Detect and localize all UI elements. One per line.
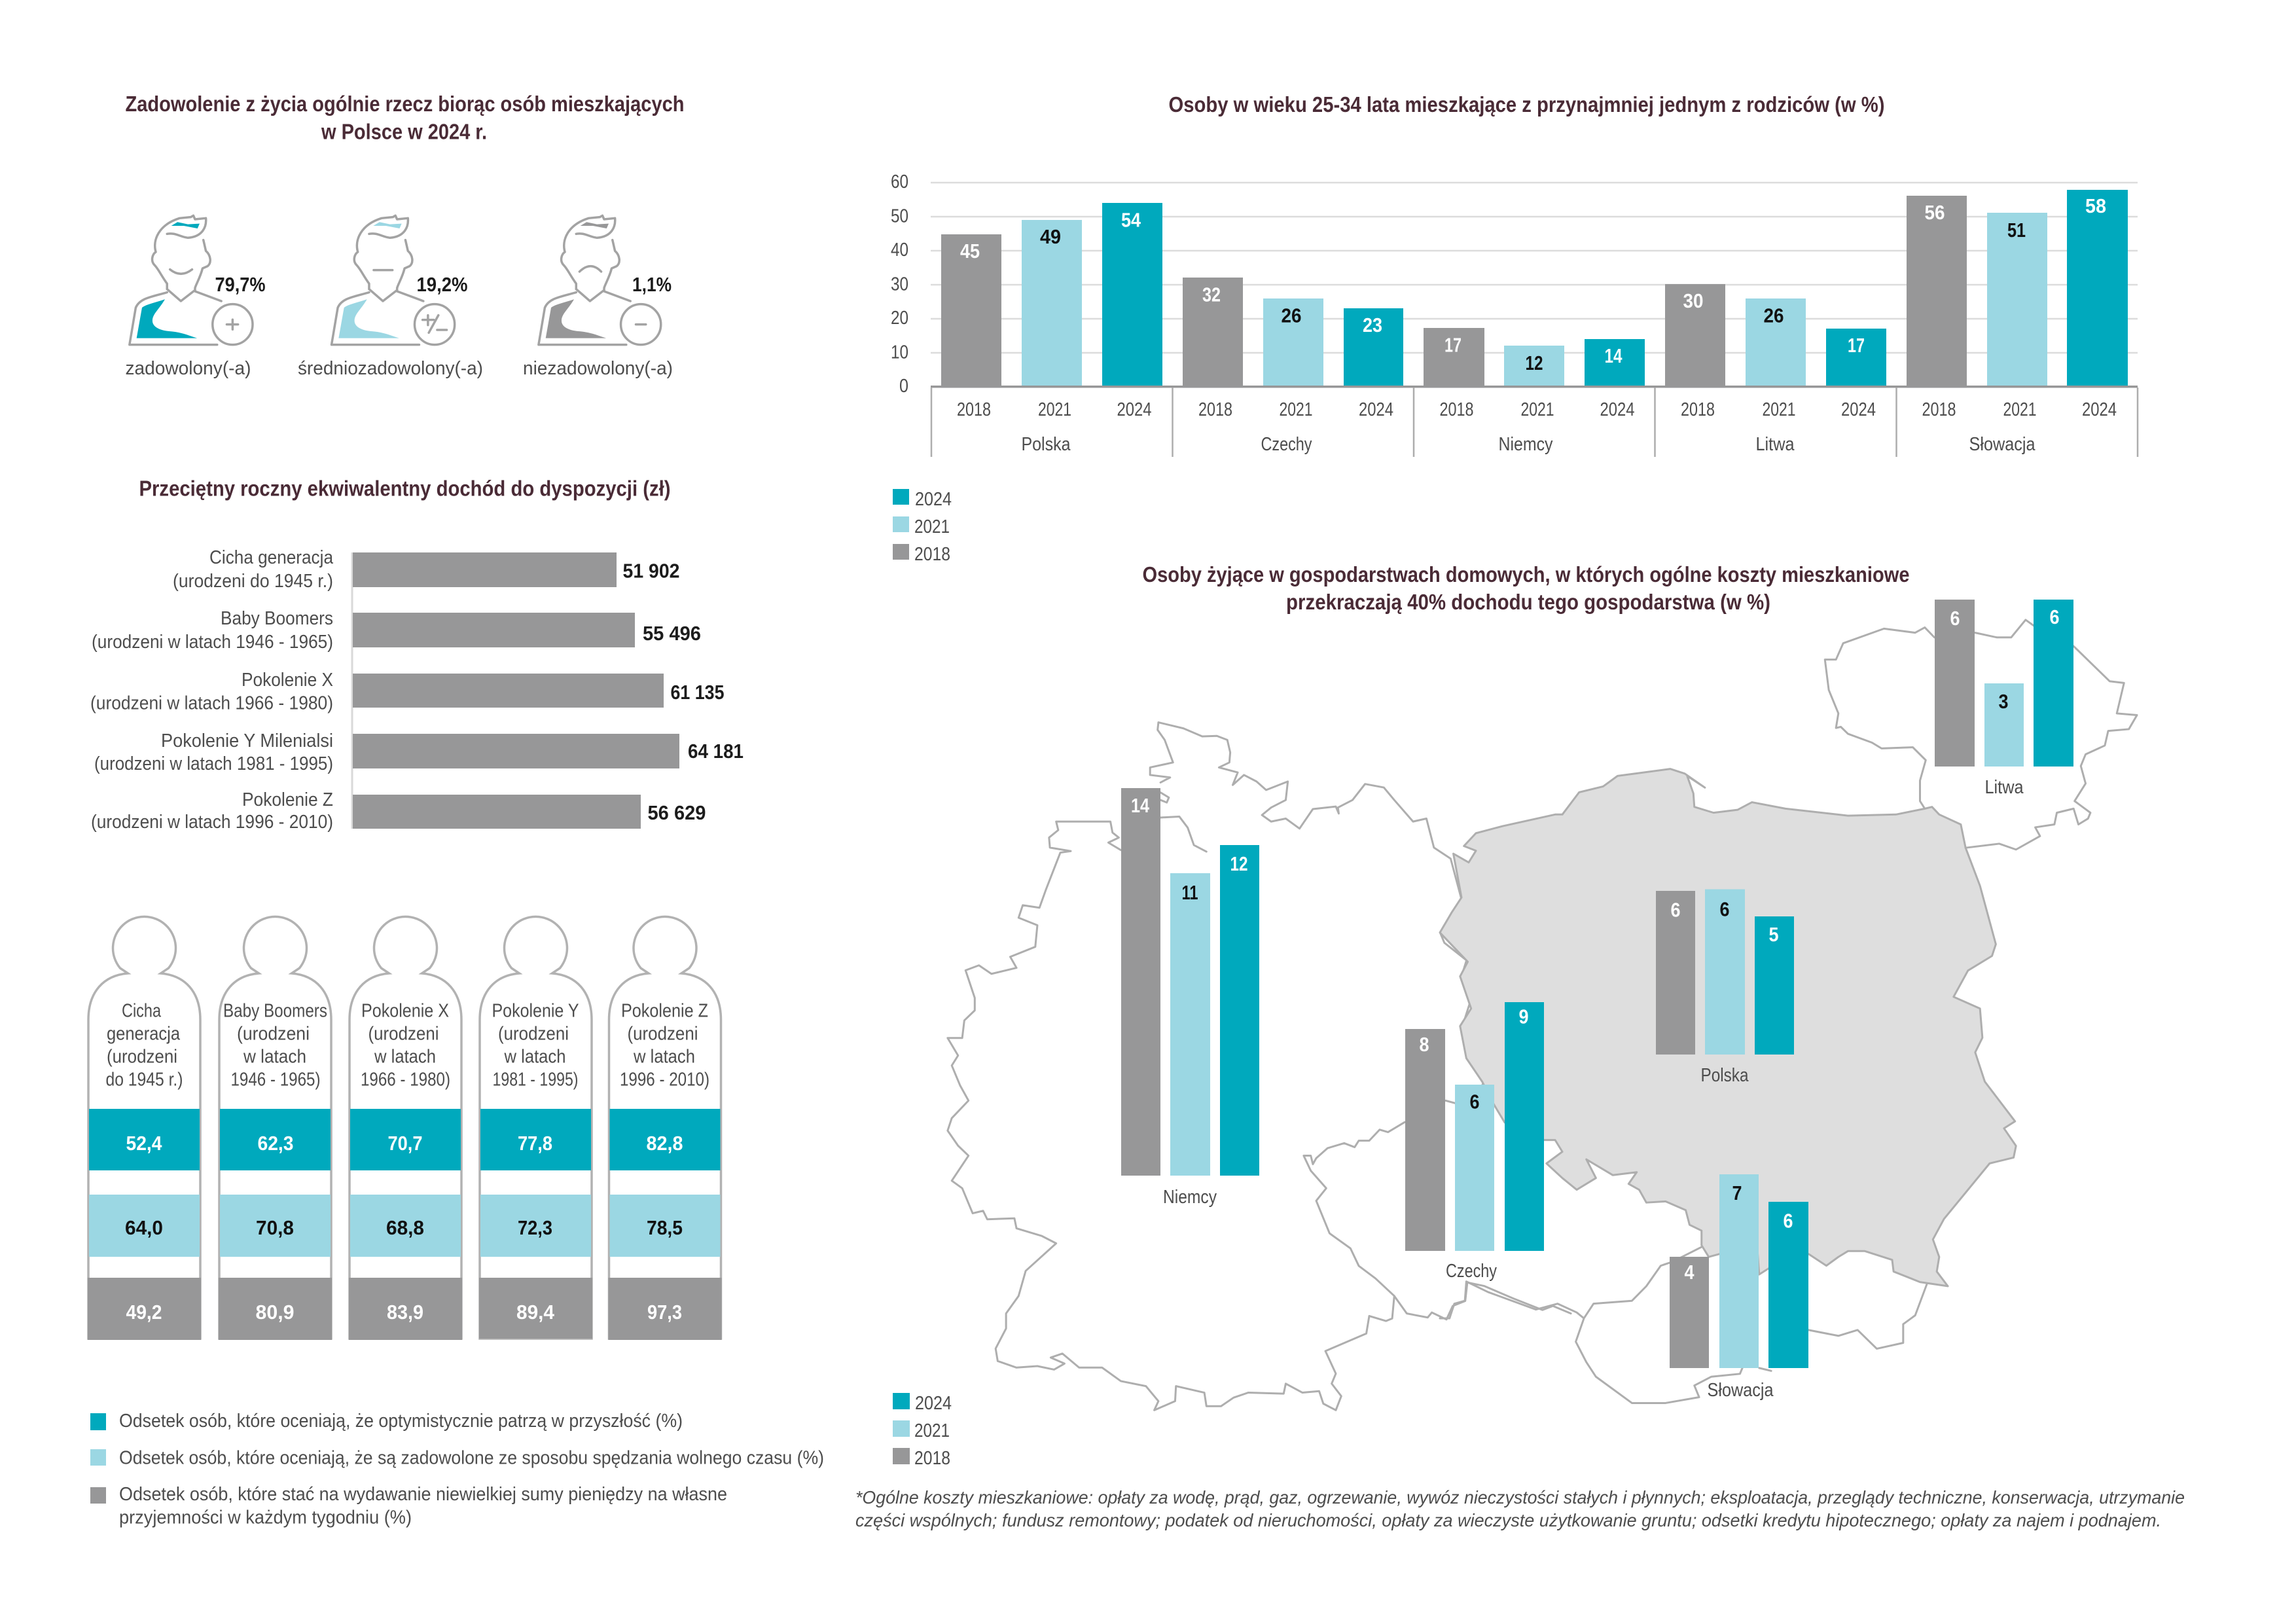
legend: years map: 2021 — [914, 1420, 950, 1441]
bars: Czechy map: Czechy — [1446, 1261, 1497, 1282]
person: Baby Boomers: 70,8 — [256, 1216, 294, 1239]
person: Cicha generacja: (urodzeni — [107, 1046, 177, 1067]
labels: generations: Cicha generacja — [209, 547, 334, 568]
person: Baby Boomers: (urodzeni — [237, 1024, 310, 1045]
bars: Litwa map: Litwa — [1984, 777, 2024, 798]
person: Pokolenie Z: (urodzeni — [627, 1024, 698, 1045]
bars: Niemcy map: 11 — [1182, 881, 1198, 904]
bars: Czechy: 32 — [1202, 283, 1221, 306]
values: income: 61 135 — [670, 681, 724, 704]
x axis with years and countries: 2021 — [1038, 399, 1071, 420]
person: Cicha generacja — [88, 916, 201, 1340]
person: Cicha generacja: 64,0 — [125, 1216, 163, 1239]
labels: generations: (urodzeni w latach 1981 - 1995) — [94, 753, 333, 774]
labels: satisfaction categories: niezadowolony(-a) — [523, 358, 673, 379]
values: income: 64 181 — [688, 740, 744, 763]
bars: Litwa — [1665, 284, 1886, 386]
map: Czechia southern border — [1394, 1282, 1571, 1320]
heading: housing cost overburden — [1143, 562, 1910, 614]
person: Pokolenie Y: 1981 - 1995) — [492, 1070, 579, 1091]
legend: years top chart — [893, 489, 952, 565]
person: Pokolenie Y — [479, 916, 592, 1339]
person: Cicha generacja: do 1945 r.) — [106, 1070, 183, 1091]
values: satisfaction percentages: 79,7% — [215, 273, 266, 296]
values: income: 55 496 — [643, 622, 701, 645]
person: Pokolenie Z: 78,5 — [647, 1216, 683, 1239]
panel: disposable income bar chart — [90, 477, 744, 833]
bars: income by generation — [351, 552, 679, 829]
person: Pokolenie Y: 77,8 — [518, 1132, 552, 1155]
bars: Polska: 45 — [960, 240, 980, 262]
legend: years map — [893, 1393, 952, 1469]
bars: Litwa map: 6 — [1950, 607, 1960, 630]
y axis and grid: 50 — [891, 206, 908, 226]
y axis and grid: 60 — [891, 171, 908, 192]
bars: Czechy map — [1405, 1002, 1544, 1282]
legend: years map: 2018 — [914, 1448, 950, 1469]
bars: Polska map: 6 — [1720, 898, 1729, 920]
bars: Słowacja: 58 — [2085, 194, 2106, 217]
bars: Słowacja map: Słowacja — [1707, 1380, 1774, 1401]
labels: generations — [90, 547, 334, 833]
x axis with years and countries: 2024 — [2082, 399, 2117, 420]
values: income: 56 629 — [648, 801, 706, 824]
heading: income: Przeciętny roczny ekwiwalentny dochód do dyspozycji (zł) — [139, 477, 670, 500]
panel: generations people chart — [88, 916, 721, 1340]
bars: Litwa map: 6 — [2050, 605, 2059, 628]
labels: generations: Baby Boomers — [221, 608, 333, 629]
x axis with years and countries: 2024 — [1600, 399, 1635, 420]
icon: moderately satisfied person — [332, 215, 455, 345]
bars: Czechy map: 6 — [1470, 1091, 1479, 1113]
labels: generations: (urodzeni w latach 1946 - 1965) — [92, 632, 333, 653]
person: Pokolenie Z: Pokolenie Z — [621, 1000, 708, 1021]
bars: Niemcy map: 14 — [1131, 794, 1150, 817]
bars: Litwa: 30 — [1683, 289, 1703, 312]
labels: satisfaction categories — [126, 358, 673, 379]
bars: Niemcy map: Niemcy — [1163, 1187, 1217, 1208]
x axis with years and countries — [931, 386, 2138, 457]
bars: Niemcy: 12 — [1525, 352, 1543, 374]
bars: Polska map: 6 — [1670, 898, 1681, 922]
bars: Słowacja: 56 — [1924, 201, 1945, 224]
person: Pokolenie X: (urodzeni — [368, 1024, 439, 1045]
person: Pokolenie Y: (urodzeni — [498, 1024, 569, 1045]
person: Cicha generacja: 49,2 — [126, 1301, 162, 1324]
x axis with years and countries: 2018 — [957, 399, 991, 420]
person: Baby Boomers: 80,9 — [255, 1301, 295, 1324]
legend: years top chart: 2024 — [915, 489, 952, 510]
person: Baby Boomers: 1946 - 1965) — [230, 1070, 321, 1091]
bars: Polska map: Polska — [1700, 1065, 1749, 1086]
x axis with years and countries: 2018 — [1922, 399, 1956, 420]
x axis with years and countries: Litwa — [1755, 434, 1795, 455]
map: Czechia and Slovakia outline — [1440, 1247, 1928, 1403]
legend: generations chart: Odsetek osób, które oceniają, że optymistycznie patrzą w przyszłość (%) — [119, 1411, 683, 1432]
x axis with years and countries: 2018 — [1198, 399, 1232, 420]
bars: Czechy — [1183, 278, 1403, 386]
legend: generations chart: Odsetek osób, które oceniają, że są zadowolone ze sposobu spędzania wolnego czasu (%) — [119, 1448, 824, 1469]
bars: Słowacja map: 7 — [1732, 1182, 1742, 1204]
y axis and grid: 40 — [891, 240, 908, 261]
bars: Polska: 54 — [1121, 208, 1141, 232]
person: Pokolenie Z — [609, 916, 721, 1340]
icon: dissatisfied person — [539, 215, 661, 345]
person: Pokolenie Y: Pokolenie Y — [492, 1000, 579, 1021]
x axis with years and countries: Czechy — [1261, 434, 1312, 455]
map: Germany outline — [948, 723, 1483, 1410]
legend: years top chart: 2018 — [914, 544, 950, 565]
person: Baby Boomers: 62,3 — [258, 1132, 293, 1155]
x axis with years and countries: 2018 — [1681, 399, 1715, 420]
bars: Czechy: 26 — [1282, 304, 1301, 327]
x axis with years and countries: 2021 — [2003, 399, 2037, 420]
bars: Słowacja map — [1670, 1174, 1808, 1401]
heading: living with parents: Osoby w wieku 25-34 lata mieszkające z przynajmniej jednym z rodziców (w %) — [1169, 92, 1885, 117]
person: Cicha generacja: generacja — [107, 1024, 181, 1045]
map: Poland filled — [1440, 769, 2016, 1286]
bars: Niemcy — [1424, 328, 1645, 386]
labels: satisfaction categories: średniozadowolony(-a) — [298, 358, 483, 379]
panel: young adults living with parents chart — [891, 92, 2138, 565]
bars: Litwa map: 3 — [1999, 690, 2008, 713]
bars: Litwa: 26 — [1763, 304, 1784, 327]
heading: housing cost overburden: przekraczają 40% dochodu tego gospodarstwa (w %) — [1286, 590, 1770, 614]
footnote — [855, 1487, 2185, 1530]
values: satisfaction percentages: 1,1% — [632, 273, 672, 296]
person: Pokolenie Y: 72,3 — [518, 1216, 552, 1239]
labels: satisfaction categories: zadowolony(-a) — [126, 358, 251, 379]
map: Lithuania outline — [1825, 620, 2137, 850]
person: Cicha generacja: 52,4 — [126, 1132, 162, 1155]
labels: generations: Pokolenie Y Milenialsi — [161, 731, 333, 751]
person: Pokolenie X: 68,8 — [386, 1216, 424, 1239]
x axis with years and countries: 2024 — [1117, 399, 1152, 420]
x axis with years and countries: 2021 — [1521, 399, 1554, 420]
legend: generations chart: przyjemności w każdym tygodniu (%) — [119, 1507, 412, 1528]
y axis and grid — [891, 171, 2138, 397]
values: income: 51 902 — [623, 559, 679, 583]
person: Baby Boomers: Baby Boomers — [223, 1000, 327, 1021]
bars: Niemcy: 14 — [1605, 344, 1623, 367]
bars: Niemcy map: 12 — [1230, 852, 1247, 875]
footnote: *Ogólne koszty mieszkaniowe: opłaty za wodę, prąd, gaz, ogrzewanie, wywóz nieczystości stałych i płynnych; eksploatacja, przeglądy techniczne, konserwacja, utrzymanie — [855, 1487, 2185, 1507]
heading: life satisfaction: w Polsce w 2024 r. — [321, 119, 487, 144]
x axis with years and countries: 2021 — [1762, 399, 1796, 420]
y axis and grid: 30 — [891, 274, 908, 295]
y axis and grid: 0 — [899, 376, 908, 397]
person: Pokolenie X: 83,9 — [387, 1301, 423, 1324]
bars: Słowacja: 51 — [2007, 219, 2026, 242]
x axis with years and countries: Niemcy — [1499, 434, 1553, 455]
x axis with years and countries: 2021 — [1279, 399, 1313, 420]
y axis and grid: 20 — [891, 308, 908, 329]
labels: generations: Pokolenie X — [242, 670, 333, 691]
person: Pokolenie X — [349, 916, 462, 1340]
x axis with years and countries: Polska — [1021, 434, 1071, 455]
person: Baby Boomers — [219, 916, 332, 1340]
bars: Polska map: 5 — [1768, 923, 1779, 946]
icon: satisfied person — [130, 215, 253, 345]
heading: life satisfaction — [126, 92, 685, 144]
bars: Litwa map — [1935, 600, 2073, 798]
bars: Litwa: 17 — [1848, 334, 1865, 357]
person: Pokolenie Y: w latach — [504, 1046, 565, 1067]
footnote: części wspólnych; fundusz remontowy; podatek od nieruchomości, opłaty za wieczyste użytkowanie gruntu; odsetki kredytu hipotecznego; opłaty za najem i podnajem. — [855, 1510, 2161, 1530]
bars: Niemcy: 17 — [1444, 334, 1462, 356]
bars: Czechy: 23 — [1363, 314, 1382, 336]
person: Cicha generacja: Cicha — [122, 1000, 162, 1021]
bars: Polska — [941, 203, 1162, 386]
person: Baby Boomers: w latach — [243, 1046, 306, 1067]
bars: Czechy map: 9 — [1518, 1005, 1529, 1028]
values: satisfaction percentages: 19,2% — [416, 273, 467, 296]
person: Pokolenie Z: 82,8 — [647, 1132, 683, 1155]
values: income — [623, 559, 744, 824]
person: Pokolenie Z: w latach — [633, 1046, 695, 1067]
panel: life satisfaction — [126, 92, 685, 379]
labels: generations: (urodzeni do 1945 r.) — [173, 571, 333, 592]
heading: life satisfaction: Zadowolenie z życia ogólnie rzecz biorąc osób mieszkających — [126, 92, 685, 116]
person: Pokolenie Y: 89,4 — [516, 1301, 555, 1324]
x axis with years and countries: Słowacja — [1969, 434, 2036, 455]
bars: Słowacja — [1907, 190, 2128, 386]
legend: generations chart — [90, 1411, 824, 1528]
panel: housing cost map — [893, 562, 2137, 1469]
bars: Czechy map: 8 — [1419, 1033, 1429, 1056]
bars: Słowacja map: 4 — [1685, 1261, 1695, 1284]
heading: housing cost overburden: Osoby żyjące w gospodarstwach domowych, w których ogólne koszty mieszkaniowe — [1143, 562, 1910, 586]
person: Pokolenie X: 70,7 — [387, 1132, 423, 1155]
y axis and grid: 10 — [891, 342, 908, 363]
bars: Niemcy map — [1121, 788, 1259, 1208]
bars: Polska: 49 — [1040, 225, 1061, 248]
x axis with years and countries: 2024 — [1359, 399, 1393, 420]
x axis with years and countries: 2024 — [1841, 399, 1876, 420]
labels: generations: (urodzeni w latach 1996 - 2010) — [91, 812, 333, 833]
bars: Słowacja map: 6 — [1783, 1210, 1793, 1232]
legend: years map: 2024 — [915, 1393, 952, 1414]
person: Pokolenie Z: 97,3 — [647, 1301, 682, 1324]
bars: Polska map — [1656, 889, 1794, 1086]
labels: generations: (urodzeni w latach 1966 - 1980) — [90, 693, 333, 713]
person: Pokolenie Z: 1996 - 2010) — [620, 1070, 709, 1091]
values: satisfaction percentages — [215, 273, 672, 296]
person: Pokolenie X: w latach — [374, 1046, 436, 1067]
person: Pokolenie X: Pokolenie X — [361, 1000, 449, 1021]
x axis with years and countries: 2018 — [1440, 399, 1474, 420]
legend: generations chart: Odsetek osób, które stać na wydawanie niewielkiej sumy pieniędzy na własne — [119, 1484, 727, 1505]
labels: generations: Pokolenie Z — [242, 789, 333, 810]
legend: years top chart: 2021 — [914, 516, 950, 537]
person: Pokolenie X: 1966 - 1980) — [361, 1070, 450, 1091]
